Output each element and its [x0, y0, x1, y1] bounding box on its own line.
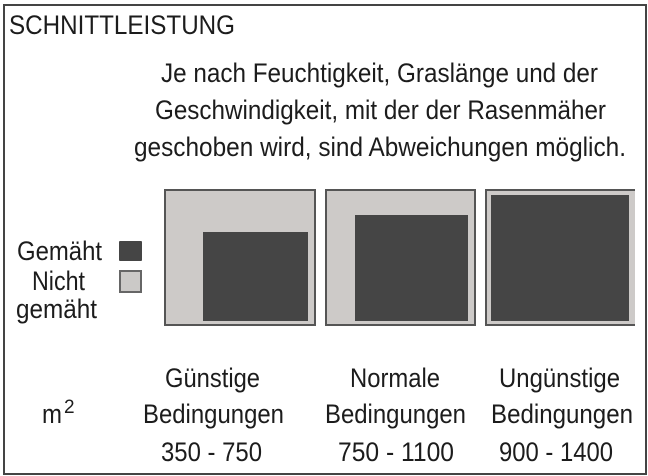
mown area: unfavourable — [491, 195, 629, 321]
description text: Je nach Feuchtigkeit, Graslänge und der — [161, 58, 598, 88]
column label: normal: 750 - 1100 — [338, 437, 454, 467]
unit label: m² — [42, 397, 75, 429]
description text: Geschwindigkeit, mit der der Rasenmäher — [155, 95, 606, 125]
column label: favourable — [143, 363, 284, 467]
legend swatch: not mown — [120, 271, 141, 292]
diagram: normal conditions — [326, 190, 475, 325]
column label: unfavourable — [491, 363, 633, 467]
legend swatch: mown — [119, 241, 142, 261]
column label: unfavourable: 900 - 1400 — [499, 437, 613, 467]
diagram: favourable conditions — [165, 190, 315, 325]
column label: favourable: 350 - 750 — [161, 437, 262, 467]
column label: normal — [325, 363, 466, 467]
legend label: Nicht gemäht: Nicht — [32, 266, 86, 296]
column label: unfavourable: Ungünstige — [499, 363, 620, 393]
title: SCHNITTLEISTUNG — [9, 10, 235, 40]
mown area: normal — [355, 215, 468, 321]
column label: normal: Normale — [350, 363, 440, 393]
legend label: Nicht gemäht — [16, 266, 98, 324]
diagram: unfavourable conditions — [485, 189, 635, 326]
column label: unfavourable: Bedingungen — [491, 399, 633, 429]
mown area: favourable — [203, 232, 308, 321]
column label: normal: Bedingungen — [325, 399, 466, 429]
legend label: Nicht gemäht: gemäht — [16, 294, 98, 324]
column label: favourable: Bedingungen — [143, 399, 284, 429]
column label: favourable: Günstige — [165, 363, 260, 393]
description text — [134, 58, 626, 162]
legend label: Gemäht: Gemäht — [17, 236, 103, 266]
unit label: m²: m — [42, 399, 62, 429]
legend — [16, 236, 142, 324]
unit label: m²: 2 — [64, 397, 75, 418]
